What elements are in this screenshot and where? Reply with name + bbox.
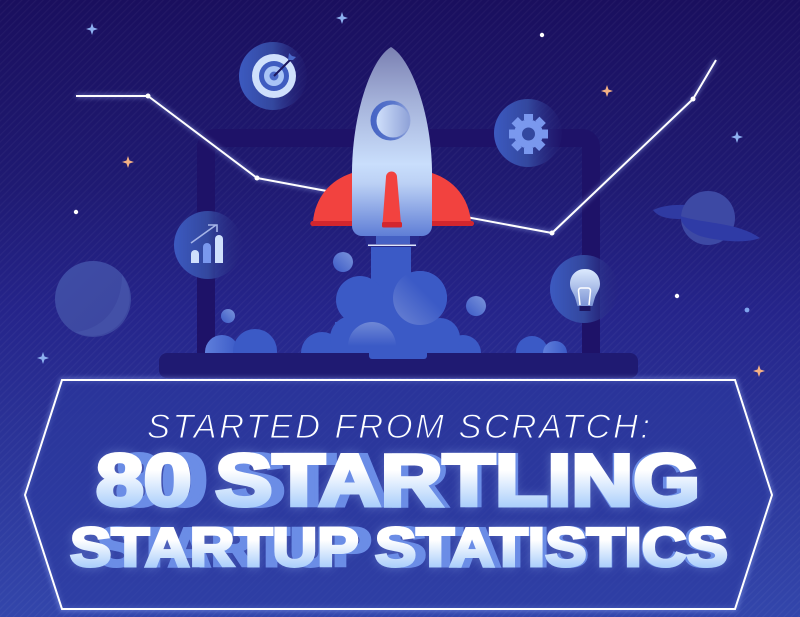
stars (37, 12, 765, 377)
title: 80 STARTLING: 80 STARTLING (116, 440, 695, 522)
title panel (25, 380, 772, 609)
planet: left (55, 261, 131, 337)
subtitle: STARTED FROM SCRATCH: (147, 408, 650, 446)
rocket fins (310, 173, 474, 226)
rocket window (370, 100, 410, 140)
title: STARTUP STATISTICS: STARTUP STATISTICS (70, 516, 728, 578)
rocket nozzle (364, 234, 420, 247)
title: STARTUP STATISTICS: STARTUP STATISTICS (70, 516, 728, 578)
smoke clouds (205, 247, 567, 353)
title: STARTUP STATISTICS: STARTUP STATISTICS (97, 516, 723, 578)
rocket center fin (382, 172, 402, 228)
laptop frame (206, 138, 591, 353)
line chart (76, 60, 716, 236)
rocket (310, 47, 474, 247)
title: 80 STARTLING: 80 STARTLING (96, 440, 700, 522)
planet: ringed (653, 191, 760, 245)
rocket body (352, 47, 432, 236)
title: 80 STARTLING: 80 STARTLING (96, 440, 700, 522)
smoke foot (369, 353, 427, 359)
laptop base (159, 353, 638, 378)
icon: light bulb (550, 255, 618, 323)
smoke bubbles (221, 252, 486, 323)
icon: gear (494, 99, 562, 167)
icon: bar chart (174, 211, 242, 279)
icon: target (239, 42, 307, 110)
